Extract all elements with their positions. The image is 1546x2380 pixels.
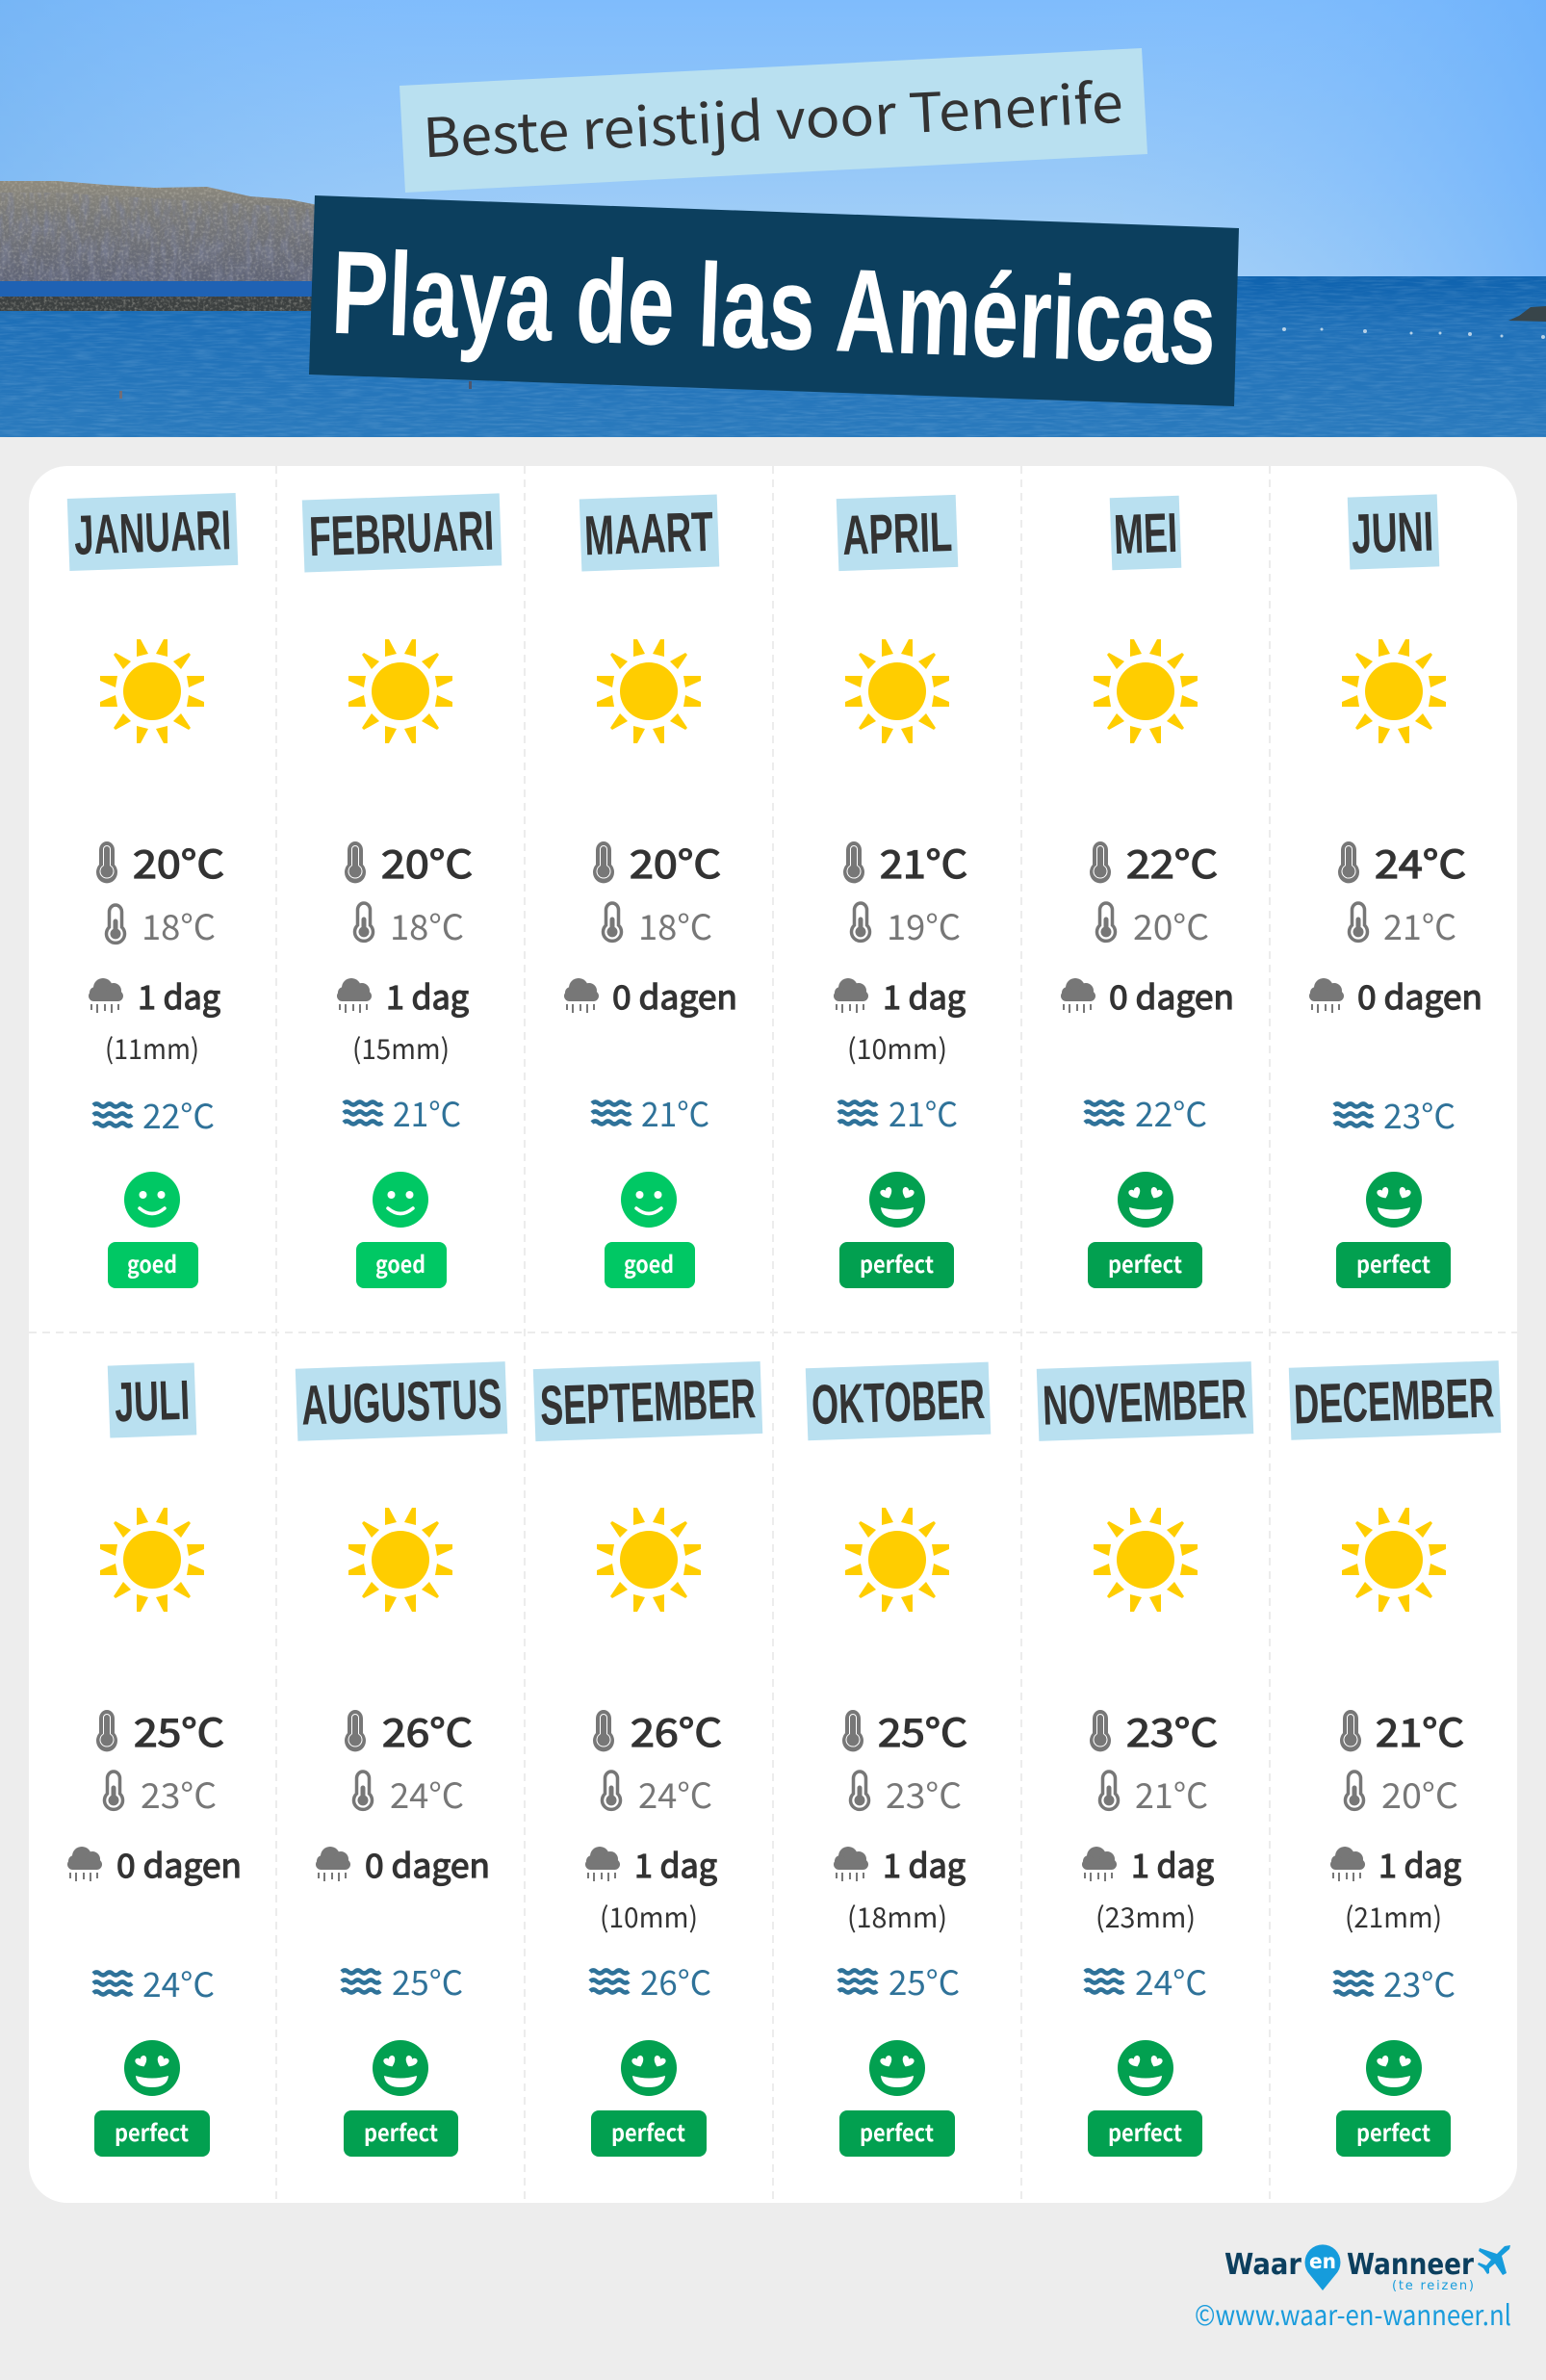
rating smiley (373, 2040, 428, 2096)
icon: map pin (1305, 2244, 1340, 2290)
rain days (834, 1840, 966, 1887)
rain days: 1 dag (883, 1840, 966, 1887)
buoys and swimmers (119, 327, 1545, 399)
month: januari (67, 493, 238, 1288)
rain days: 0 dagen (365, 1840, 490, 1887)
logo word: Waar: Waar (1224, 2248, 1301, 2282)
icon: airplane (1478, 2245, 1510, 2275)
sea temperature (838, 1088, 958, 1137)
month: oktober (806, 1362, 991, 2157)
rating smiley (869, 1172, 925, 1228)
rating smiley (621, 1172, 677, 1228)
icon: map pin: en (1309, 2250, 1336, 2273)
low temperature (104, 1769, 217, 1819)
sea temperature (342, 1956, 463, 2005)
low temperature (851, 1769, 962, 1819)
rain days (337, 971, 469, 1019)
rain days: 1 dag (1131, 1840, 1214, 1887)
month label (1348, 494, 1439, 570)
month label (806, 1362, 991, 1440)
month label (67, 493, 238, 571)
low temperature (1097, 900, 1209, 950)
high temperature: 26°C (382, 1702, 473, 1758)
month label (302, 493, 502, 573)
month label: NOVEMBER (1042, 1367, 1248, 1437)
rating badge: perfect (364, 2114, 438, 2148)
high temperature: 25°C (134, 1702, 224, 1758)
high temperature: 22°C (1126, 834, 1218, 890)
month: mei (1061, 496, 1234, 1288)
low temperature: 19°C (887, 900, 961, 950)
rain days: 0 dagen (1357, 971, 1482, 1019)
sea temperature: 22°C (1135, 1088, 1207, 1137)
rain days (1309, 971, 1482, 1019)
low temperature (106, 900, 216, 950)
high temperature (1090, 1702, 1218, 1758)
low temperature (1099, 1769, 1208, 1819)
rating badge (605, 1242, 695, 1288)
rating badge: perfect (1356, 1246, 1430, 1280)
low temperature (354, 1769, 464, 1819)
rating smiley (124, 1172, 180, 1228)
rain days (67, 1840, 242, 1887)
sea temperature: 24°C (1135, 1956, 1207, 2005)
rainfall: (23mm) (1095, 1896, 1196, 1936)
high temperature: 26°C (631, 1702, 722, 1758)
month: april (834, 495, 967, 1288)
rating badge: perfect (860, 1246, 934, 1280)
subtitle banner (399, 48, 1147, 193)
month label (580, 495, 719, 571)
sea temperature (344, 1088, 461, 1137)
rating smiley (373, 1172, 428, 1228)
rating smiley (1366, 1172, 1422, 1228)
headland (0, 181, 322, 282)
month label: FEBRUARI (308, 500, 495, 568)
inner bay (0, 281, 322, 298)
icon: sun (100, 639, 204, 743)
high temperature: 20°C (133, 834, 224, 890)
rain days: 1 dag (634, 1840, 717, 1887)
rain days: 1 dag (386, 971, 469, 1019)
high temperature: 21°C (880, 834, 967, 890)
sea temperature: 21°C (889, 1088, 958, 1137)
rating badge: goed (375, 1246, 425, 1280)
sea temperature (93, 1090, 215, 1139)
rain days: 0 dagen (116, 1840, 242, 1887)
high temperature (96, 834, 224, 890)
high temperature: 21°C (1376, 1702, 1464, 1758)
rain days (1061, 971, 1234, 1019)
sea temperature: 25°C (889, 1956, 960, 2005)
sea temperature: 23°C (1383, 1090, 1456, 1139)
month label: AUGUSTUS (300, 1367, 502, 1437)
rainfall: (10mm) (847, 1027, 947, 1068)
rating badge (839, 2110, 955, 2157)
month label (296, 1361, 507, 1441)
white card (29, 466, 1517, 2203)
rating badge (344, 2110, 458, 2157)
sea temperature (1334, 1090, 1456, 1139)
month label (1037, 1361, 1253, 1441)
month label: MAART (583, 501, 714, 567)
icon: sun (1342, 1508, 1446, 1612)
month label: APRIL (841, 501, 953, 567)
rating smiley (621, 2040, 677, 2096)
month label (533, 1361, 762, 1441)
icon: sun (1094, 1508, 1198, 1612)
low temperature: 20°C (1381, 1769, 1458, 1819)
header photo: Tenerife coast (0, 0, 1546, 437)
logo word: Wanneer: Wanneer (1347, 2248, 1474, 2282)
low temperature: 24°C (390, 1769, 464, 1819)
month label: SEPTEMBER (539, 1367, 757, 1437)
sea temperature (93, 1958, 215, 2007)
rain days: 0 dagen (612, 971, 737, 1019)
high temperature: 25°C (878, 1702, 967, 1758)
rating badge: perfect (115, 2114, 189, 2148)
high temperature (345, 1702, 473, 1758)
rating badge (356, 1242, 447, 1288)
rainfall: (11mm) (105, 1027, 199, 1068)
high temperature: 24°C (1375, 834, 1466, 890)
rainfall: (21mm) (1345, 1896, 1442, 1936)
low temperature (603, 900, 712, 950)
high temperature (345, 834, 473, 890)
low temperature (1346, 1769, 1458, 1819)
rating badge: perfect (860, 2114, 934, 2148)
month: maart (564, 495, 737, 1288)
sea temperature (592, 1088, 709, 1137)
rain days: 1 dag (883, 971, 966, 1019)
icon: sun (348, 1508, 452, 1612)
month label: JANUARI (73, 499, 232, 567)
rating smiley (1118, 1172, 1173, 1228)
icon: sun (348, 639, 452, 743)
month label: OKTOBER (811, 1368, 986, 1436)
month: februari (302, 493, 502, 1288)
month label (108, 1362, 196, 1438)
month: december (1289, 1360, 1501, 2157)
sea temperature: 21°C (641, 1088, 709, 1137)
rainfall: (18mm) (847, 1896, 947, 1936)
month label: MEI (1113, 502, 1178, 566)
low temperature: 18°C (390, 900, 464, 950)
rating badge: perfect (1108, 2114, 1182, 2148)
low temperature: 21°C (1383, 900, 1456, 950)
low temperature: 18°C (638, 900, 712, 950)
title banner (309, 195, 1239, 406)
icon: sun (597, 1508, 701, 1612)
month: juni (1309, 494, 1482, 1288)
website credit: ©www.waar-en-wanneer.nl (1195, 2293, 1511, 2334)
low temperature (851, 900, 961, 950)
rainfall: (10mm) (600, 1896, 698, 1936)
sea temperature: 26°C (640, 1956, 711, 2005)
rating badge (1336, 1242, 1451, 1288)
month: september (533, 1361, 762, 2157)
sea temperature (1085, 1956, 1207, 2005)
low temperature: 24°C (638, 1769, 712, 1819)
sea temperature: 25°C (392, 1956, 463, 2005)
high temperature (593, 834, 721, 890)
rating badge (1088, 1242, 1202, 1288)
sea temperature: 21°C (393, 1088, 461, 1137)
rain days (1082, 1840, 1214, 1887)
logo tagline: (te reizen) (1392, 2279, 1474, 2293)
low temperature (1350, 900, 1456, 950)
rating badge: goed (127, 1246, 177, 1280)
rating badge: perfect (1356, 2114, 1430, 2148)
rain days (834, 971, 966, 1019)
high temperature (843, 834, 967, 890)
high temperature (1090, 834, 1218, 890)
month: juli (67, 1362, 242, 2157)
rain days (1330, 1840, 1461, 1887)
sea temperature (838, 1956, 960, 2005)
rain days: 0 dagen (1109, 971, 1234, 1019)
low temperature (603, 1769, 712, 1819)
icon: sun (100, 1508, 204, 1612)
rating smiley (869, 2040, 925, 2096)
rating badge (1088, 2110, 1202, 2157)
subtitle text: Beste reistijd voor Tenerife (421, 61, 1124, 173)
low temperature: 18°C (142, 900, 216, 950)
icon: sun (845, 639, 949, 743)
month: november (1037, 1361, 1253, 2157)
rating badge (1336, 2110, 1451, 2157)
icon: sun (597, 639, 701, 743)
rain days: 1 dag (138, 971, 220, 1019)
rain days (89, 971, 220, 1019)
sky (0, 0, 1546, 277)
logo: Waar en Wanneer (1224, 2244, 1510, 2293)
sea temperature (1334, 1958, 1456, 2007)
distant rock (1508, 306, 1546, 322)
high temperature: 20°C (630, 834, 721, 890)
icon: sun (845, 1508, 949, 1612)
rating smiley (1366, 2040, 1422, 2096)
rain days (316, 1840, 490, 1887)
low temperature: 21°C (1135, 1769, 1208, 1819)
rating badge (94, 2110, 210, 2157)
high temperature (1338, 834, 1466, 890)
rain days (585, 1840, 717, 1887)
rating badge (108, 1242, 198, 1288)
month label: JUNI (1351, 501, 1434, 566)
sea temperature (590, 1956, 711, 2005)
breakwater (0, 297, 322, 311)
rain days (564, 971, 737, 1019)
rain days: 1 dag (1379, 1840, 1461, 1887)
title text: Playa de las Américas (329, 227, 1219, 390)
rating badge: perfect (1108, 1246, 1182, 1280)
sea temperature: 24°C (142, 1958, 215, 2007)
sea temperature: 23°C (1383, 1958, 1456, 2007)
high temperature: 23°C (1126, 1702, 1218, 1758)
rating badge (591, 2110, 707, 2157)
low temperature: 20°C (1133, 900, 1209, 950)
sea temperature: 22°C (142, 1090, 215, 1139)
low temperature: 23°C (886, 1769, 962, 1819)
low temperature: 23°C (141, 1769, 217, 1819)
rating badge: perfect (611, 2114, 685, 2148)
high temperature (96, 1702, 224, 1758)
month label (837, 495, 958, 571)
high temperature (842, 1702, 967, 1758)
sea temperature (1085, 1088, 1207, 1137)
high temperature (1340, 1702, 1464, 1758)
rating badge (839, 1242, 954, 1288)
icon: sun (1094, 639, 1198, 743)
icon: sun (1342, 639, 1446, 743)
month label: JULI (114, 1369, 191, 1434)
month label (1110, 496, 1181, 570)
sea (0, 276, 1546, 437)
low temperature (354, 900, 464, 950)
month: augustus (296, 1361, 507, 2157)
rainfall: (15mm) (352, 1027, 450, 1068)
rating smiley (124, 2040, 180, 2096)
rating badge: goed (624, 1246, 674, 1280)
high temperature: 20°C (381, 834, 473, 890)
high temperature (593, 1702, 722, 1758)
rating smiley (1118, 2040, 1173, 2096)
